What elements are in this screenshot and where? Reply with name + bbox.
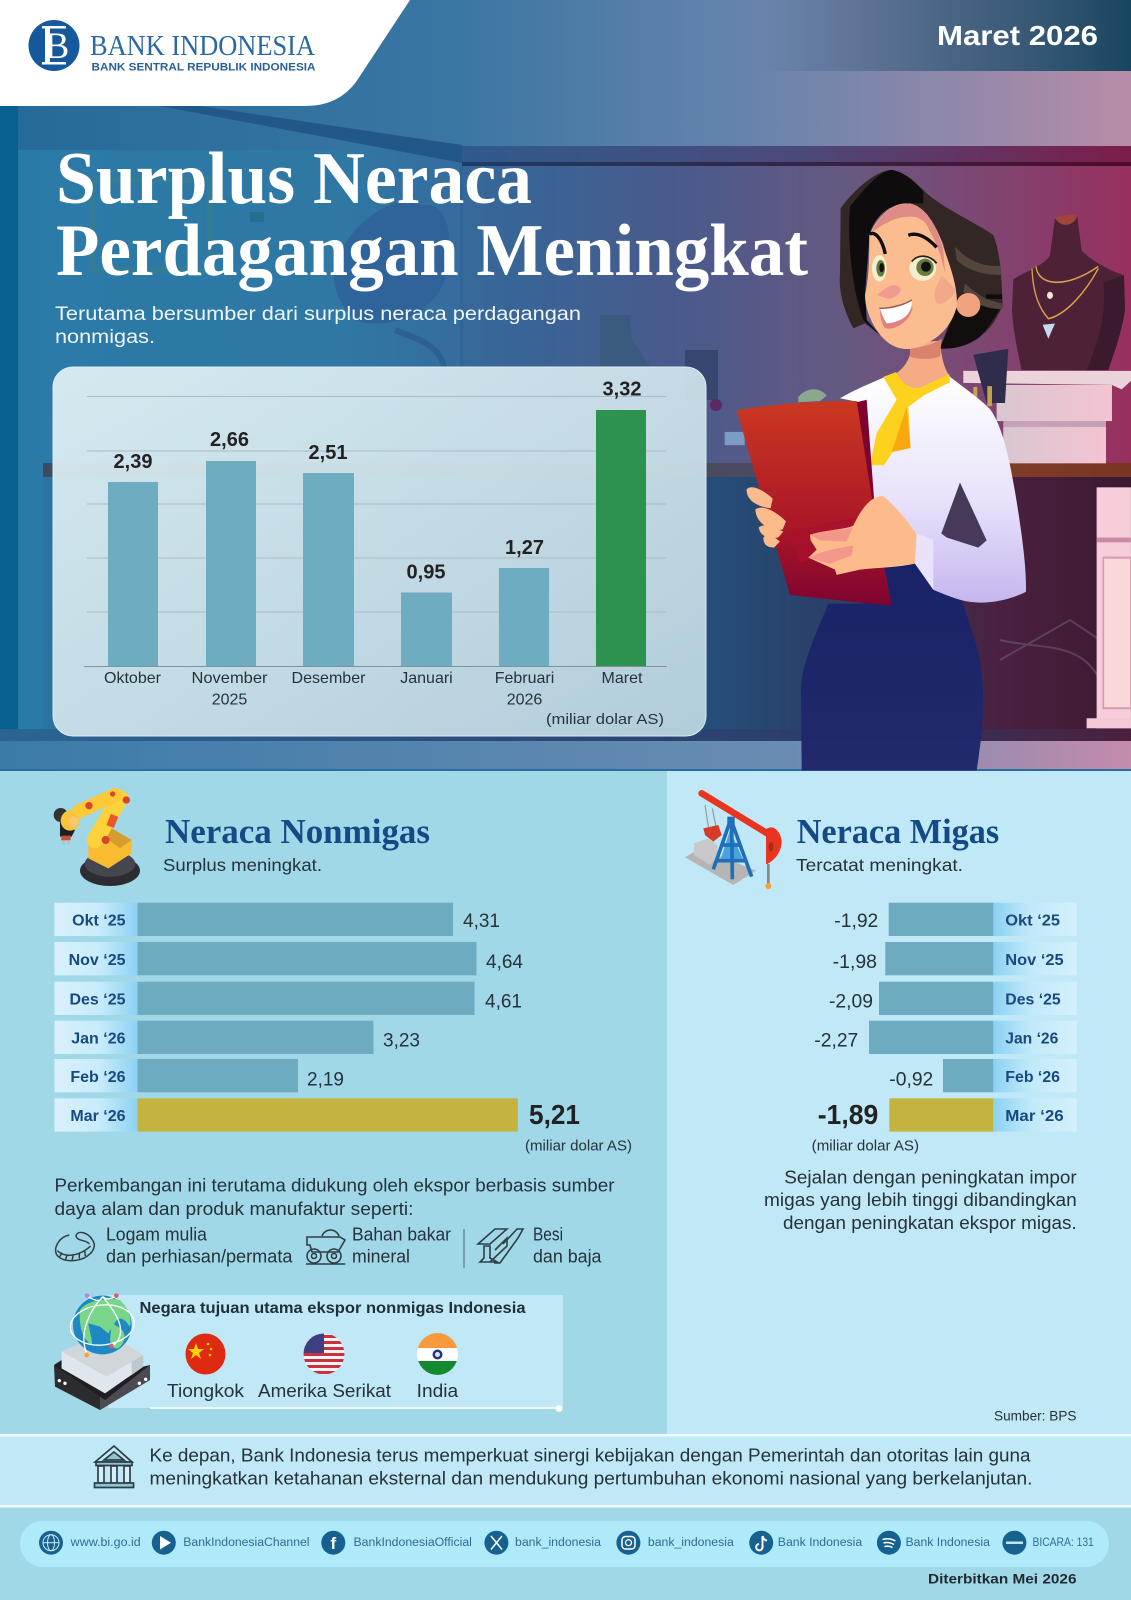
text: iron and steel: dan baja xyxy=(533,1246,602,1266)
flag: China xyxy=(186,1334,226,1374)
footer: contact and social links: www.bi.go.id xyxy=(70,1537,141,1549)
footer: contact and social links: bank_indonesia xyxy=(515,1537,602,1549)
footer: contact and social links: BankIndonesiaOfficial xyxy=(354,1537,472,1549)
icon: oil pump xyxy=(685,793,782,889)
heading: Neraca Nonmigas: Surplus meningkat. xyxy=(163,855,322,875)
subtitle xyxy=(55,304,581,348)
head xyxy=(840,170,1003,359)
text: mineral fuels: Bahan bakar xyxy=(352,1224,451,1244)
bar chart: migas: Mar ‘26 xyxy=(1005,1108,1064,1125)
bar chart: migas: Nov ‘25 xyxy=(1005,952,1064,969)
logo panel: Bank Indonesia: BANK INDONESIA xyxy=(90,30,315,62)
icon: mining truck xyxy=(306,1230,346,1264)
right section background xyxy=(667,771,1131,1434)
panel: main export destinations: Amerika Serikat xyxy=(258,1381,391,1401)
top right date banner: Maret 2026 xyxy=(937,20,1098,51)
panel: main export destinations: Negara tujuan utama ekspor nonmigas Indonesia xyxy=(140,1300,526,1317)
bar chart: migas: -1,89 xyxy=(818,1099,878,1130)
bar chart: migas: -2,27 xyxy=(814,1030,858,1052)
text block: migas explanation: Sejalan dengan peningkatan impor xyxy=(784,1168,1077,1188)
axis labels: Januari xyxy=(400,670,453,687)
logo panel: Bank Indonesia: B xyxy=(45,26,69,67)
bar values: 2,66 xyxy=(210,429,249,451)
icon: facebook xyxy=(321,1531,345,1555)
bar chart: nonmigas: 2,19 xyxy=(307,1070,344,1090)
bar chart: nonmigas: 4,64 xyxy=(486,952,523,973)
title: Surplus Neraca xyxy=(56,138,532,220)
axis labels: Maret xyxy=(602,670,643,687)
bar values: 1,27 xyxy=(505,537,544,559)
bar chart: nonmigas: Nov ‘25 xyxy=(69,952,126,969)
text: mineral fuels: mineral xyxy=(352,1246,410,1266)
bar chart: nonmigas: 5,21 xyxy=(529,1099,580,1130)
bar chart: nonmigas: 4,61 xyxy=(485,992,522,1012)
icon: facebook: f xyxy=(330,1534,336,1553)
bar chart: migas: -0,92 xyxy=(889,1070,933,1090)
bar chart: migas: Feb ‘26 xyxy=(1005,1069,1060,1086)
footer: contact and social links: Bank Indonesia xyxy=(778,1537,863,1549)
bar chart: nonmigas xyxy=(54,903,632,1154)
neck xyxy=(890,341,951,399)
text block: migas explanation: migas yang lebih tinggi dibandingkan xyxy=(764,1190,1077,1210)
logo panel: Bank Indonesia xyxy=(0,0,410,106)
top right date banner xyxy=(760,0,1131,71)
panel: closing statement xyxy=(0,1434,1131,1508)
bar chart: nonmigas: Okt ‘25 xyxy=(72,912,126,930)
bar chart: migas: -1,92 xyxy=(834,911,878,932)
skirt xyxy=(801,552,983,770)
icon: bank building xyxy=(94,1446,134,1488)
flag: India xyxy=(416,1333,459,1376)
icon: bicara contact centre xyxy=(1002,1531,1026,1555)
bar chart: nonmigas: Mar ‘26 xyxy=(70,1108,126,1125)
title xyxy=(56,138,808,292)
text block: migas explanation xyxy=(764,1168,1077,1233)
bar chart: migas: Jan ‘26 xyxy=(1005,1030,1058,1048)
logo panel: Bank Indonesia: BANK SENTRAL REPUBLIK INDONESIA xyxy=(92,62,316,74)
text: precious metals xyxy=(106,1224,293,1266)
text block: export drivers: daya alam dan produk manufaktur seperti: xyxy=(54,1199,414,1219)
text block: migas explanation: dengan peningkatan ekspor migas. xyxy=(783,1213,1077,1233)
bar chart: migas: Okt ‘25 xyxy=(1005,912,1060,930)
text: iron and steel xyxy=(533,1224,602,1266)
bar values: 3,32 xyxy=(603,378,641,400)
title: Perdagangan Meningkat xyxy=(56,210,808,292)
icon: globe on platform xyxy=(54,1293,150,1410)
icon: spotify xyxy=(877,1531,901,1555)
bar chart: nonmigas: 4,31 xyxy=(463,911,500,932)
pedestal with bust and necklaces xyxy=(725,214,1131,728)
panel: main export destinations xyxy=(108,1295,563,1412)
icon: X xyxy=(484,1531,508,1555)
bar chart: migas xyxy=(812,903,1077,1154)
panel: main export destinations: India xyxy=(417,1381,459,1401)
axis labels xyxy=(104,670,643,708)
text: precious metals: dan perhiasan/permata xyxy=(106,1246,293,1266)
icon: website xyxy=(39,1531,63,1555)
bar chart: migas: -2,09 xyxy=(829,992,873,1012)
bar chart: nonmigas: (miliar dolar AS) xyxy=(525,1138,632,1154)
text block: export drivers xyxy=(54,1176,614,1219)
footer: contact and social links: bank_indonesia xyxy=(648,1537,734,1549)
footer: contact and social links: BICARA: 131 xyxy=(1032,1537,1094,1549)
footer background xyxy=(0,1508,1131,1600)
source note: Sumber: BPS xyxy=(994,1408,1076,1424)
subtitle: nonmigas. xyxy=(55,327,155,348)
icon: bracelet xyxy=(56,1232,94,1261)
bar values: 2,51 xyxy=(309,442,347,464)
bar values: 0,95 xyxy=(407,562,445,584)
bars xyxy=(108,410,646,666)
text: iron and steel: Besi xyxy=(533,1224,563,1244)
flag: USA xyxy=(303,1333,345,1375)
woman with red folder and jewellery display xyxy=(725,170,1131,770)
yellow scarf xyxy=(870,372,950,465)
icon: steel beams xyxy=(478,1229,523,1263)
bar chart: migas: Des ‘25 xyxy=(1005,992,1061,1008)
axis labels: Februari xyxy=(495,670,554,687)
hands xyxy=(747,487,933,590)
axis labels: 2025 xyxy=(212,692,247,708)
chart panel: monthly trade balance: (miliar dolar AS) xyxy=(546,711,664,728)
bar chart: nonmigas: 3,23 xyxy=(383,1030,420,1052)
text: mineral fuels xyxy=(352,1224,451,1266)
footer: contact and social links xyxy=(20,1521,1109,1567)
axis labels: November xyxy=(192,670,268,687)
icon: tiktok xyxy=(749,1531,773,1555)
blouse xyxy=(840,377,1026,603)
heading: Neraca Nonmigas xyxy=(163,812,430,875)
axis labels: Desember xyxy=(292,670,366,687)
panel: closing statement: Ke depan, Bank Indonesia terus memperkuat sinergi kebijakan dengan Pemerintah dan otoritas lain guna xyxy=(150,1446,1032,1466)
heading: Neraca Migas: Tercatat meningkat. xyxy=(796,855,963,875)
icon: robot arm xyxy=(54,791,140,886)
bar chart: nonmigas: Des ‘25 xyxy=(69,992,126,1008)
left section background xyxy=(0,771,667,1434)
bar chart: migas: -1,98 xyxy=(833,952,877,973)
footer: contact and social links: Bank Indonesia xyxy=(906,1537,991,1549)
panel: closing statement: meningkatkan ketahanan eksternal dan mendukung pertumbuhan ekonomi nasional yang berkelanjutan. xyxy=(150,1468,1032,1488)
heading: Neraca Migas xyxy=(796,812,999,875)
bar values xyxy=(114,378,641,584)
text: precious metals: Logam mulia xyxy=(106,1224,208,1244)
footer: contact and social links: BankIndonesiaChannel xyxy=(183,1537,310,1549)
subtitle: Terutama bersumber dari surplus neraca perdagangan xyxy=(55,304,581,325)
heading: Neraca Migas: Neraca Migas xyxy=(797,812,999,851)
hero background: jewellery shop interior xyxy=(0,0,1131,771)
panel: main export destinations: Tiongkok xyxy=(167,1381,245,1401)
axis labels: Oktober xyxy=(104,670,162,687)
icon: instagram xyxy=(616,1531,640,1555)
chart panel: monthly trade balance xyxy=(53,367,706,736)
text block: export drivers: Perkembangan ini terutama didukung oleh ekspor berbasis sumber xyxy=(54,1176,614,1196)
bar values: 2,39 xyxy=(114,451,152,473)
red folder xyxy=(857,400,875,511)
heading: Neraca Nonmigas: Neraca Nonmigas xyxy=(165,812,430,851)
icon: youtube xyxy=(152,1531,176,1555)
publication date: Diterbitkan Mei 2026 xyxy=(928,1570,1077,1586)
bar chart: migas: (miliar dolar AS) xyxy=(812,1138,919,1154)
bar chart: nonmigas: Jan ‘26 xyxy=(71,1030,126,1048)
axis labels: 2026 xyxy=(507,692,542,708)
bar chart: nonmigas: Feb ‘26 xyxy=(70,1069,126,1086)
